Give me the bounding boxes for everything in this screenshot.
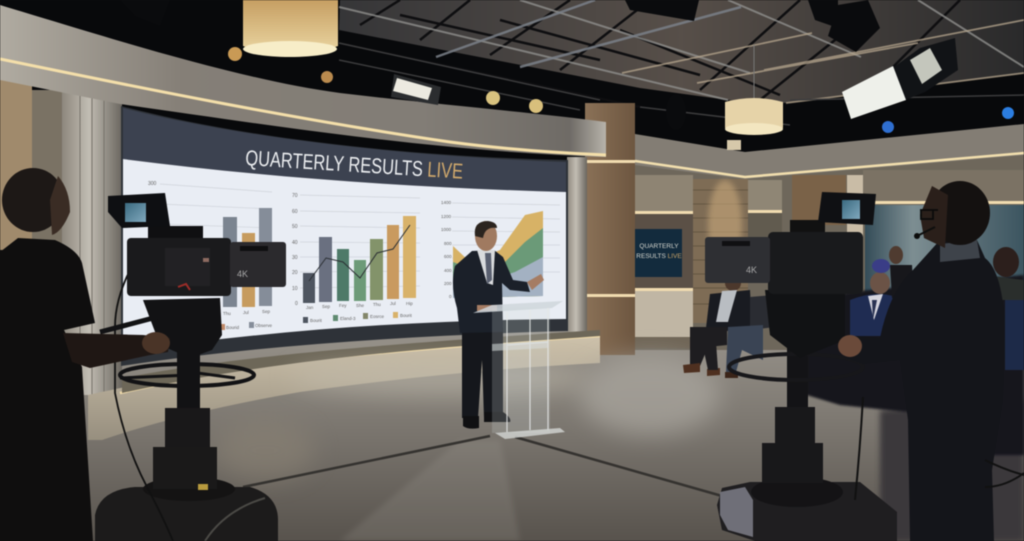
centre bar chart: She	[356, 303, 365, 308]
guest 1	[683, 275, 752, 376]
pendant lamp left	[243, 0, 338, 57]
ceiling	[0, 0, 1024, 170]
curved silver band	[0, 5, 606, 157]
upper wall panel	[635, 175, 693, 213]
blue lights	[882, 121, 894, 133]
wall tv	[635, 229, 682, 277]
right area chart: 200	[444, 281, 452, 286]
fluid head	[143, 298, 222, 358]
camera lens box: 4K	[237, 269, 248, 279]
right area chart	[441, 200, 560, 299]
operator head	[2, 168, 64, 232]
left bar chart	[148, 181, 273, 330]
left bar chart: 300	[148, 181, 157, 187]
steering ring	[120, 364, 254, 386]
centre bar chart: 40	[292, 240, 298, 246]
left wall pillars	[0, 80, 122, 395]
dark audience backdrop	[790, 275, 1024, 455]
left camera operator	[0, 168, 170, 541]
headset mic	[917, 227, 935, 236]
screen header band	[123, 108, 566, 192]
hand	[527, 274, 544, 290]
centre bar chart: Fey	[339, 303, 347, 308]
camera lens box	[705, 237, 770, 283]
centre bar chart: 30	[292, 255, 298, 261]
floor reflections	[215, 355, 1024, 541]
guest 2	[725, 295, 775, 378]
camera body	[127, 226, 231, 296]
guest 3 in blue suit	[850, 259, 903, 336]
title: QUARTERLY RESULTS LIVE	[245, 146, 464, 184]
ceiling fixtures	[120, 0, 1014, 150]
right side guests	[992, 247, 1024, 370]
pedestal base	[95, 477, 278, 541]
centre bar chart: 0	[295, 301, 298, 307]
centre bar chart: 50	[292, 224, 298, 230]
black fixtures	[120, 0, 880, 130]
seated audience	[683, 246, 1024, 455]
pedestal column	[762, 340, 823, 483]
viewfinder	[108, 193, 170, 228]
centre bar chart: 60	[292, 209, 298, 215]
cable	[855, 397, 863, 500]
right area chart: 1200	[441, 214, 452, 219]
right area chart: 600	[444, 254, 452, 259]
video wall	[121, 106, 568, 366]
centre bar chart: Bourit	[310, 318, 323, 323]
camera lens box	[230, 242, 286, 287]
centre bar chart: 70	[292, 193, 298, 199]
right area chart: 400	[444, 268, 452, 273]
centre bar chart: Thu	[373, 302, 381, 307]
right wall	[635, 124, 1024, 350]
centre bar chart: 10	[292, 286, 298, 292]
centre bar chart: Jul	[390, 301, 396, 306]
camera lens box: 4K	[746, 265, 757, 275]
pedestal column	[153, 345, 217, 490]
screen white area	[123, 159, 566, 352]
wood pillar	[567, 103, 635, 355]
glasses	[920, 210, 938, 219]
pedestal base	[717, 477, 897, 541]
trousers	[462, 328, 503, 418]
left camera rig	[95, 193, 286, 541]
left bar chart: Bourid	[226, 325, 240, 330]
dark wall panel	[635, 214, 693, 288]
shoes	[463, 412, 510, 429]
flood light	[391, 74, 441, 105]
head	[475, 221, 497, 251]
left bar chart: Observe	[255, 323, 273, 328]
camera body	[768, 220, 863, 294]
hand	[838, 335, 862, 357]
steering ring	[729, 354, 863, 380]
centre bar chart	[292, 193, 420, 323]
stage riser	[88, 330, 600, 440]
pendant lamp right	[725, 45, 783, 135]
left bar chart: Jul	[243, 310, 249, 315]
glass podium	[473, 301, 565, 439]
soft box	[842, 38, 958, 119]
viewfinder	[818, 192, 876, 225]
centre bar chart: Hip	[406, 301, 413, 306]
centre bar chart: Jan	[306, 305, 314, 310]
left bar chart: Thu	[223, 311, 231, 316]
side panels	[748, 180, 782, 212]
left bar chart: Sep	[262, 309, 271, 314]
window backdrop	[865, 205, 1024, 315]
right area chart: 1400	[441, 200, 452, 205]
right area chart: 800	[444, 241, 452, 246]
suit jacket	[453, 250, 530, 333]
spot lights	[228, 47, 741, 150]
presenter	[453, 221, 544, 429]
centre bar chart: 20	[292, 270, 298, 276]
centre bar chart: Bourit	[400, 313, 413, 318]
lower wall panel	[635, 290, 693, 337]
centre bar chart: Sep	[322, 304, 331, 309]
shirt and tie	[477, 250, 495, 285]
centre bar chart: Eosrce	[370, 314, 385, 319]
screen frame	[121, 106, 568, 366]
right camera rig	[705, 192, 897, 541]
right area chart: 1000	[441, 227, 452, 232]
wall tv: QUARTERLY	[639, 243, 679, 250]
wall top band	[635, 124, 1024, 179]
floor cables	[985, 460, 1024, 487]
right area chart: 0	[449, 294, 452, 299]
cables	[115, 270, 173, 541]
operator forearm and hand	[63, 333, 170, 368]
operator collar	[940, 240, 980, 262]
centre bar chart: Eland-3	[340, 316, 356, 321]
standing guest	[889, 246, 914, 300]
floor	[0, 330, 1024, 541]
stone column	[693, 179, 748, 323]
operator head	[930, 181, 990, 245]
wall tv: RESULTS LIVE	[636, 253, 682, 260]
right camera operator	[838, 181, 1005, 541]
fluid head	[765, 290, 845, 358]
